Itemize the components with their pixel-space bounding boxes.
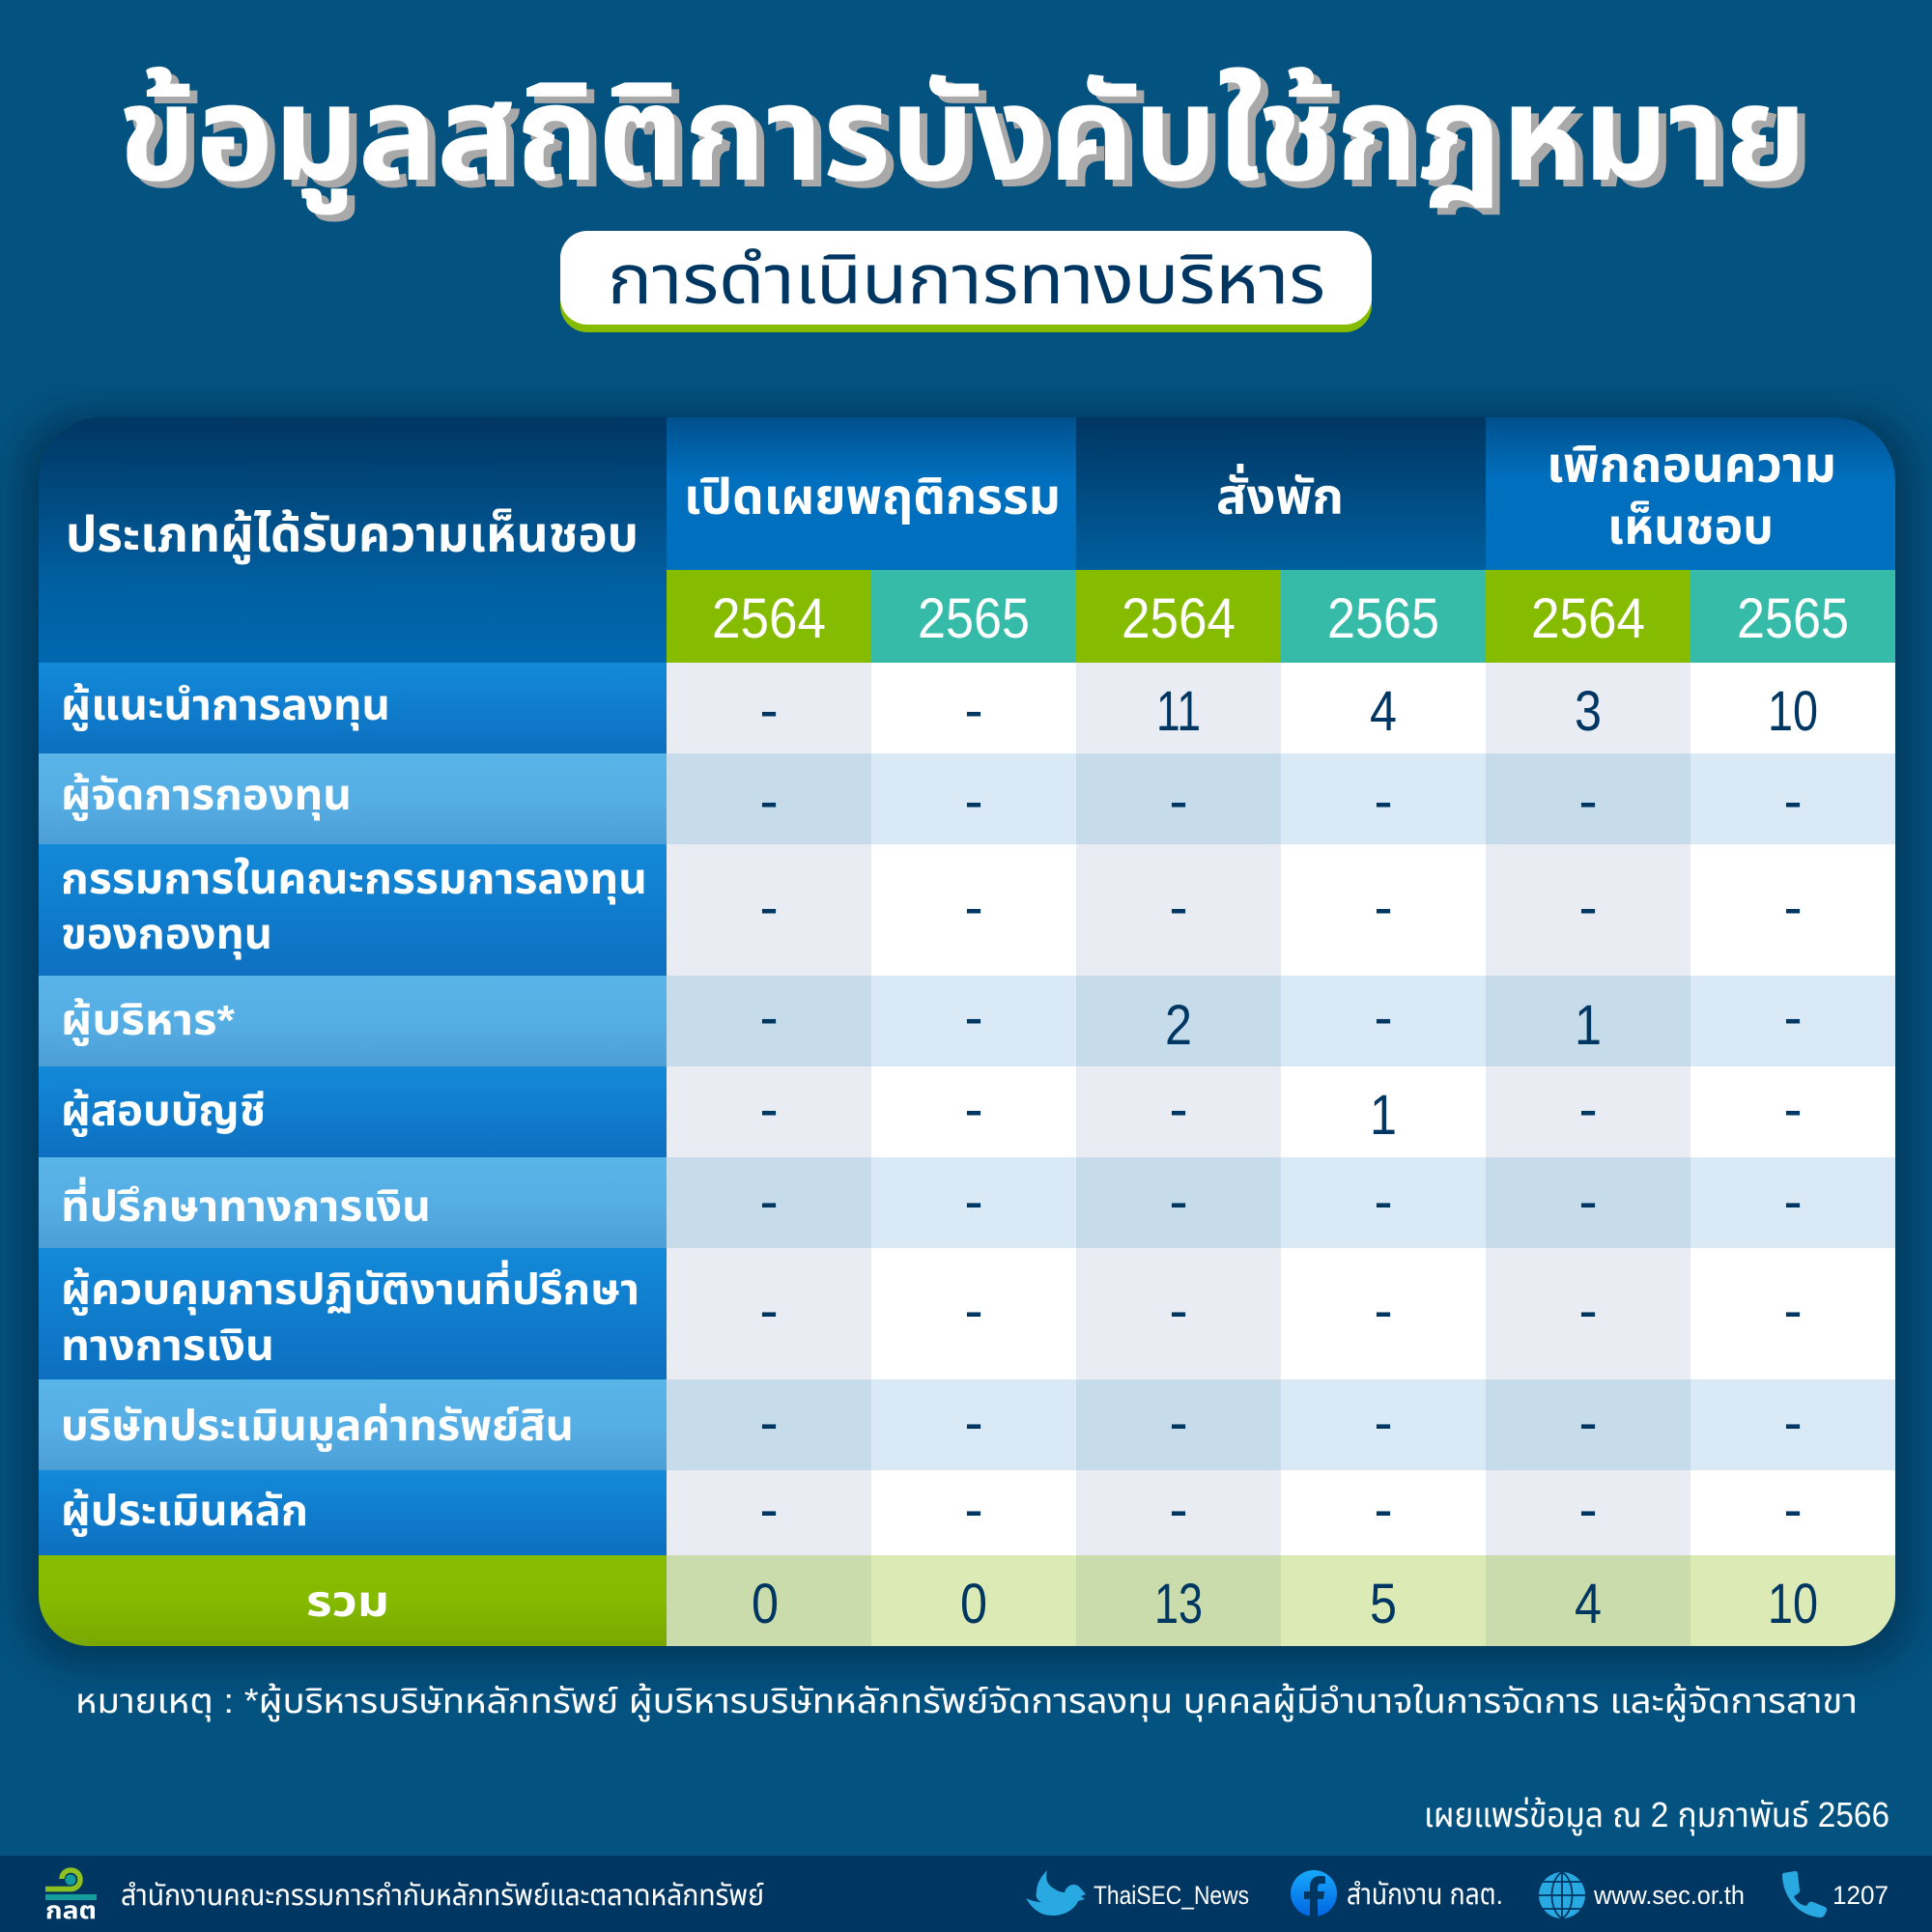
table [39, 417, 1895, 1646]
row: auditor: ผู้สอบบัญชี [61, 1088, 266, 1137]
header: revocation: เห็นชอบ [1607, 499, 1774, 555]
row: total: 5 [1370, 1573, 1397, 1635]
row: principal valuer: - [1169, 1478, 1188, 1542]
row: auditor: - [1578, 1078, 1598, 1141]
row: valuation company: - [1169, 1391, 1188, 1455]
row: valuation company: - [1578, 1391, 1598, 1455]
row: financial advisor: - [964, 1171, 983, 1233]
row: financial advisor: - [1578, 1171, 1598, 1233]
hotline: 1207 [1833, 1881, 1889, 1910]
row: investment committee: - [1374, 876, 1393, 939]
row: total: 0 [752, 1573, 779, 1635]
logo: SEC: กลต [45, 1897, 97, 1924]
row: investment advisor: 4 [1370, 680, 1397, 743]
title: ข้อมูลสถิติการบังคับใช้กฎหมาย [118, 60, 1806, 215]
row: investment committee [39, 844, 1895, 976]
header: license type: ประเภทผู้ได้รับความเห็นชอบ [66, 507, 639, 565]
year header row: 2564 [1122, 587, 1236, 650]
row: executives: - [1783, 986, 1803, 1049]
row: executives: 1 [1575, 994, 1602, 1057]
facebook page: สำนักงาน กลต. [1347, 1879, 1503, 1911]
row: investment advisor [39, 663, 1895, 753]
year header row: 2564 [712, 587, 826, 650]
year header row [667, 570, 1895, 664]
row: compliance officer: ทางการเงิน [61, 1322, 274, 1370]
row: principal valuer: - [964, 1478, 983, 1542]
row: auditor: - [759, 1078, 779, 1141]
row: valuation company [39, 1379, 1895, 1470]
title: ข้อมูลสถิติการบังคับใช้กฎหมาย [126, 67, 1814, 222]
row: compliance officer: - [759, 1279, 779, 1343]
row: fund manager: ผู้จัดการกองทุน [61, 772, 352, 821]
row: financial advisor: ที่ปรึกษาทางการเงิน [61, 1177, 431, 1231]
row: fund manager: - [1374, 770, 1393, 833]
row: valuation company: บริษัทประเมินมูลค่าทรัพย์สิน [61, 1403, 574, 1452]
footnote: หมายเหตุ : *ผู้บริหารบริษัทหลักทรัพย์ ผู้บริหารบริษัทหลักทรัพย์จัดการลงทุน บุคคลผู้มีอำนาจในการจัดการ และผู้จัดการสาขา [75, 1681, 1858, 1721]
row: investment committee: - [964, 876, 983, 939]
row: financial advisor: - [759, 1171, 779, 1233]
year header row: 2565 [918, 587, 1030, 650]
row: principal valuer: - [759, 1478, 779, 1542]
row: auditor [39, 1066, 1895, 1157]
row: principal valuer: - [1783, 1478, 1803, 1542]
row: fund manager: - [1169, 770, 1188, 833]
row: compliance officer: ผู้ควบคุมการปฏิบัติงานที่ปรึกษา [61, 1260, 639, 1316]
row: total: 10 [1768, 1573, 1818, 1635]
row: total: 4 [1575, 1573, 1602, 1635]
row: auditor: - [1783, 1078, 1803, 1141]
row: total [39, 1555, 1895, 1646]
icon: facebook [1291, 1870, 1337, 1917]
row: total: รวม [306, 1578, 389, 1626]
row: total: 13 [1154, 1573, 1203, 1635]
row: compliance officer: - [1374, 1279, 1393, 1343]
row: financial advisor: - [1783, 1171, 1803, 1233]
footer bar [0, 1856, 1932, 1932]
row: financial advisor: - [1374, 1171, 1393, 1233]
row: executives: - [964, 986, 983, 1049]
row: investment committee: - [1578, 876, 1598, 939]
row: principal valuer: - [1374, 1478, 1393, 1542]
row: investment advisor: - [964, 679, 983, 742]
icon: globe [1539, 1872, 1585, 1918]
year header row: 2565 [1737, 587, 1849, 650]
row: investment advisor: 3 [1575, 680, 1602, 743]
row: principal valuer [39, 1470, 1895, 1555]
subtitle pill [560, 231, 1372, 332]
row: investment advisor: 10 [1768, 680, 1818, 743]
header: suspension: สั่งพัก [1216, 464, 1344, 526]
row: auditor: 1 [1370, 1084, 1397, 1147]
row: investment committee: - [759, 876, 779, 939]
row: fund manager: - [1578, 770, 1598, 833]
year header row: 2564 [1531, 587, 1645, 650]
subtitle pill: การดำเนินการทางบริหาร [608, 242, 1325, 319]
row: valuation company: - [964, 1391, 983, 1455]
year header row: 2565 [1327, 587, 1439, 650]
row: financial advisor: - [1169, 1171, 1188, 1233]
header: revocation: เพิกถอนความ [1547, 438, 1836, 494]
icon: phone [1782, 1871, 1827, 1918]
row: total: 0 [960, 1573, 987, 1635]
row: financial advisor [39, 1157, 1895, 1248]
row: executives: - [1374, 986, 1393, 1049]
row: compliance officer: - [964, 1279, 983, 1343]
row: fund manager: - [759, 770, 779, 833]
row: executives [39, 976, 1895, 1066]
row: valuation company: - [1374, 1391, 1393, 1455]
logo: SEC [45, 1870, 97, 1924]
row: compliance officer [39, 1248, 1895, 1379]
header: suspension [1076, 417, 1486, 570]
row: executives: - [759, 986, 779, 1049]
row: valuation company: - [1783, 1391, 1803, 1455]
row: compliance officer: - [1783, 1279, 1803, 1343]
row: investment advisor: ผู้แนะนำการลงทุน [61, 682, 390, 731]
table shadow [23, 415, 1911, 1663]
row: investment committee: - [1169, 876, 1188, 939]
icon: twitter [1026, 1870, 1086, 1916]
publication date: เผยแพร่ข้อมูล ณ 2 กุมภาพันธ์ 2566 [1424, 1795, 1889, 1835]
row: compliance officer: - [1578, 1279, 1598, 1343]
row: investment committee: กรรมการในคณะกรรมการลงทุน [61, 856, 647, 905]
row: investment advisor: - [759, 679, 779, 742]
header: license type [39, 417, 667, 663]
header: disclosure [667, 417, 1076, 570]
organisation name: สำนักงานคณะกรรมการกำกับหลักทรัพย์และตลาดหลักทรัพย์ [121, 1880, 764, 1912]
row: principal valuer: ผู้ประเมินหลัก [61, 1488, 308, 1537]
row: fund manager [39, 753, 1895, 844]
row: fund manager: - [964, 770, 983, 833]
row: fund manager: - [1783, 770, 1803, 833]
row: compliance officer: - [1169, 1279, 1188, 1343]
twitter handle: ThaiSEC_News [1094, 1881, 1249, 1910]
row: valuation company: - [759, 1391, 779, 1455]
row: investment advisor: 11 [1156, 680, 1201, 743]
row: executives: 2 [1165, 994, 1192, 1057]
row: executives: ผู้บริหาร* [61, 997, 236, 1046]
header: revocation [1486, 417, 1895, 570]
row: investment committee: ของกองทุน [61, 911, 272, 960]
row: auditor: - [1169, 1078, 1188, 1141]
row: investment committee: - [1783, 876, 1803, 939]
header: disclosure: เปิดเผยพฤติกรรม [684, 469, 1061, 526]
website: www.sec.or.th [1593, 1881, 1745, 1910]
row: auditor: - [964, 1078, 983, 1141]
row: principal valuer: - [1578, 1478, 1598, 1542]
